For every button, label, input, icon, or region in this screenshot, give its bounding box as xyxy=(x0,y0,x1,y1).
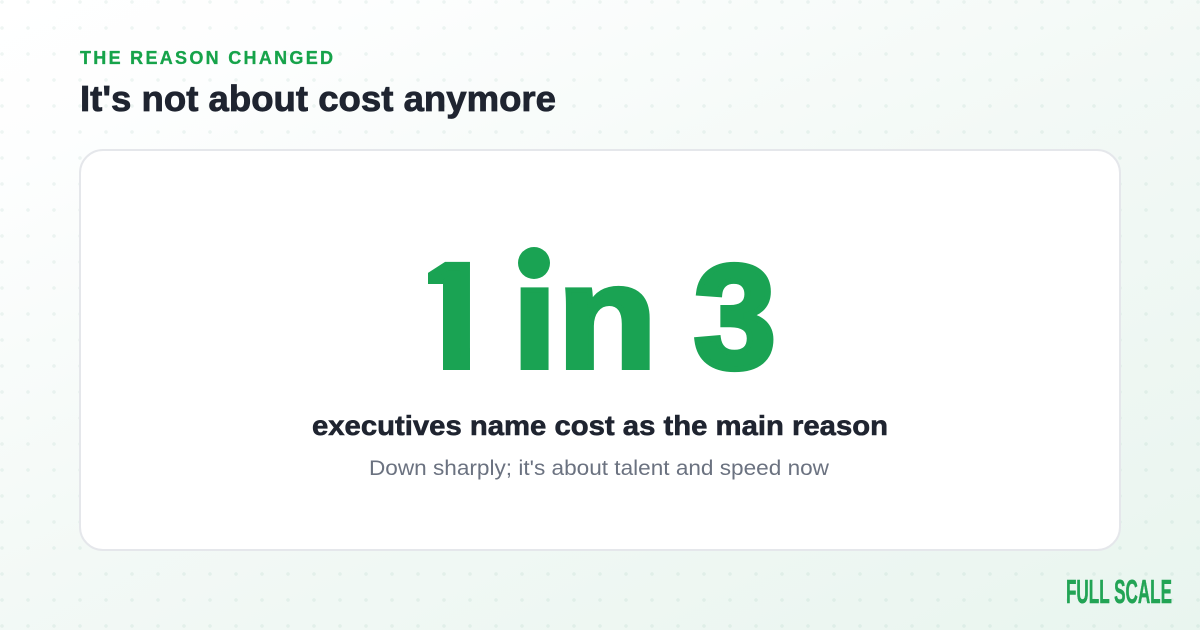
big statistic xyxy=(428,247,774,372)
eyebrow label: THE REASON CHANGED xyxy=(80,48,333,68)
big statistic: 1 xyxy=(411,236,493,400)
big statistic: 3 xyxy=(694,236,776,400)
big statistic: in xyxy=(512,236,657,400)
title: It's not about cost anymore xyxy=(80,78,556,119)
panel: main card xyxy=(79,149,1121,551)
supporting note: Down sharply; it's about talent and speed now xyxy=(369,457,830,480)
statistic description: executives name cost as the main reason xyxy=(312,410,888,441)
